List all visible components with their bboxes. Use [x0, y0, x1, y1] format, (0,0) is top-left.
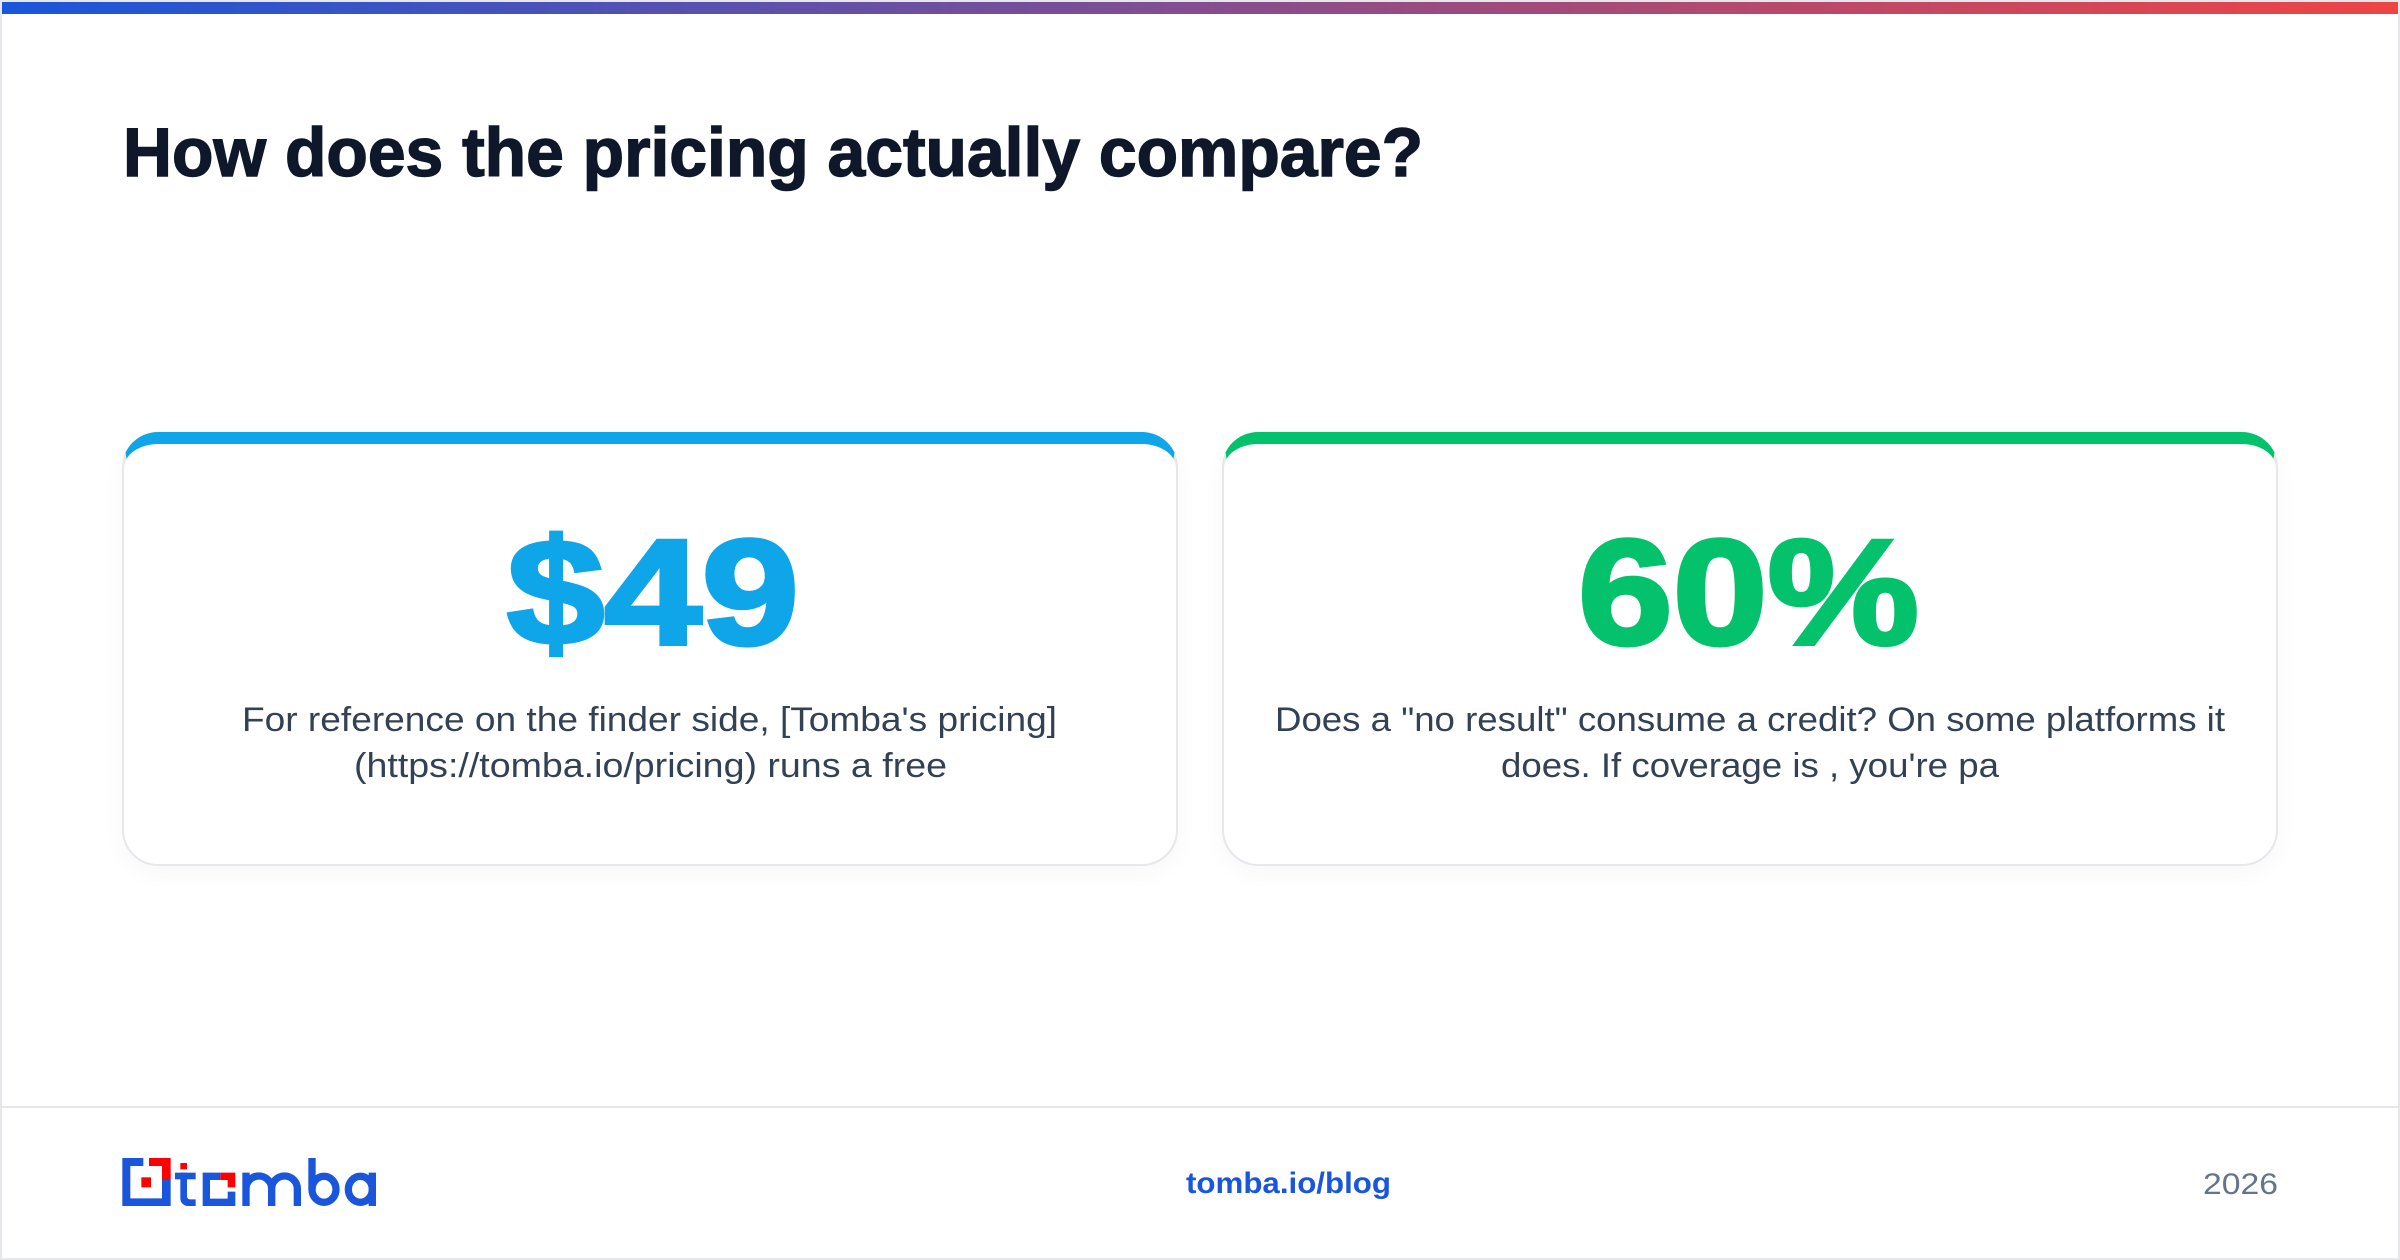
stat: $49: $49 — [507, 508, 799, 676]
description: no result credit: does. If coverage is , you're pa — [1501, 747, 1999, 785]
description: no result credit — [1275, 701, 2226, 785]
description: no result credit: Does a "no result" consume a credit? On some platforms it — [1275, 701, 2226, 739]
description: tomba pricing: (https://tomba.io/pricing) runs a free — [354, 747, 947, 785]
footer year: 2026 — [2203, 1168, 2278, 1201]
card: tomba pricing — [122, 432, 1178, 866]
description: tomba pricing — [242, 701, 1057, 785]
logo: tomba — [122, 1158, 376, 1206]
footer link: tomba.io/blog — [1186, 1167, 1391, 1200]
title: How does the pricing actually compare? — [123, 114, 1423, 191]
description: tomba pricing: For reference on the finder side, [Tomba's pricing] — [242, 701, 1057, 739]
top gradient bar — [2, 2, 2398, 14]
stat: 60%: 60% — [1578, 508, 1919, 676]
card: no result credit — [1222, 432, 2278, 866]
